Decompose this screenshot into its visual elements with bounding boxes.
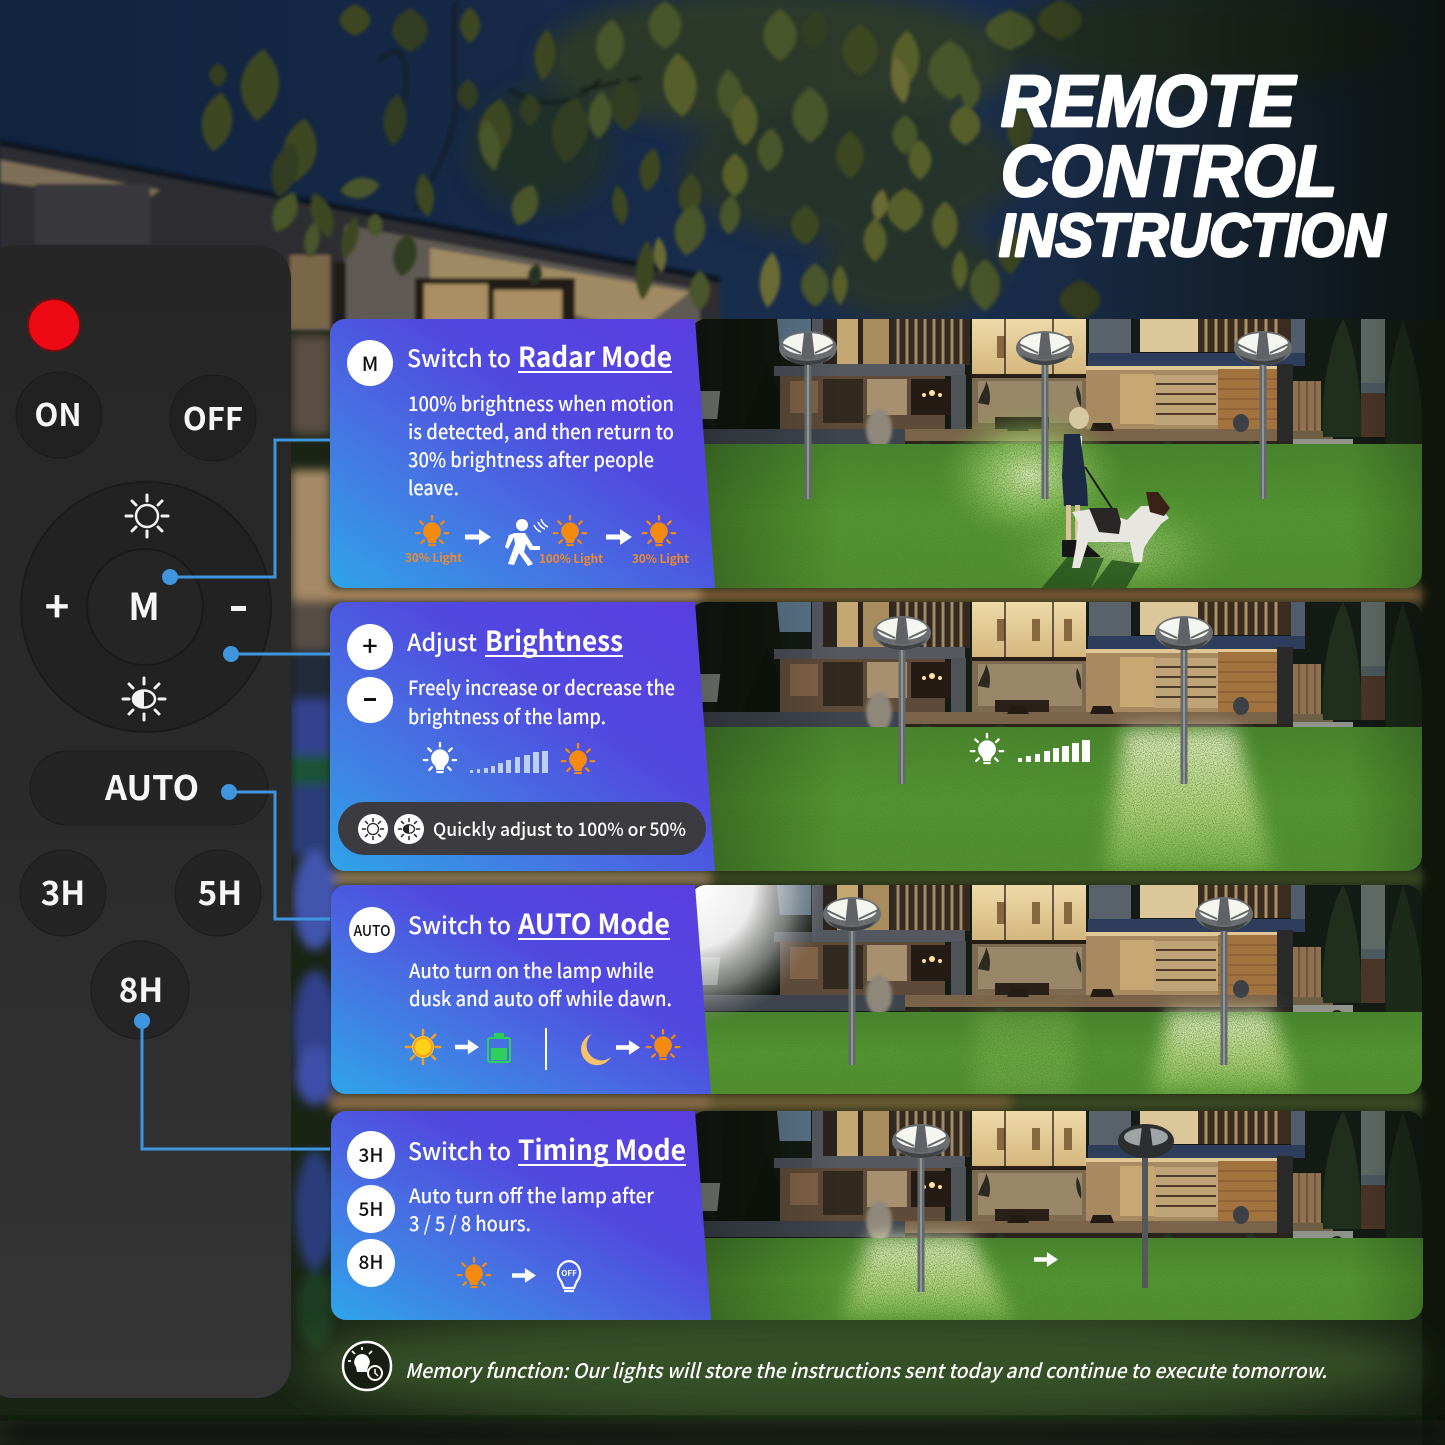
brightness up key (126, 495, 168, 537)
red indicator light (28, 299, 80, 351)
radar mode description: is detected, and then return to (408, 416, 674, 445)
radar mode description: 30% brightness after people (408, 444, 654, 473)
girl walking a dog (1062, 407, 1170, 568)
panel: adjust brightness (330, 602, 1425, 871)
quick adjust pill: Quickly adjust to 100% or 50% (433, 816, 686, 842)
8H button (91, 941, 189, 1039)
arrow overlay (1034, 1252, 1058, 1267)
AUTO badge (349, 907, 395, 953)
timing mode photo scene (695, 1111, 1425, 1320)
auto mode heading: Switch to (408, 906, 511, 941)
connector: dial to brightness (223, 646, 330, 662)
M key: M (128, 577, 160, 631)
panel: timing mode (331, 1111, 1425, 1320)
OFF button (170, 375, 256, 461)
title: REMOTE (1001, 62, 1297, 142)
5H button: 5H (198, 867, 242, 915)
radar mode sequence icons: 30% Light (632, 550, 689, 567)
connector: M to radar mode (162, 440, 330, 585)
timing mode heading (408, 1129, 686, 1169)
gaps and flowers between panels (291, 335, 1422, 1350)
8H badge (347, 1239, 395, 1287)
radar mode sequence icons: 30% Light (405, 549, 462, 566)
brightness scale icon (424, 743, 594, 774)
foliage mass (470, 0, 1400, 320)
quick adjust pill (338, 802, 706, 855)
ON button: ON (34, 390, 82, 435)
auto mode description (409, 955, 672, 1012)
timing mode description: 3 / 5 / 8 hours. (409, 1208, 531, 1237)
panel: radar mode (330, 319, 1425, 605)
timing mode heading: Timing Mode (518, 1129, 686, 1169)
plus badge: + (362, 625, 378, 664)
lamp to off icons (458, 1258, 580, 1291)
radar mode heading: Switch to (407, 339, 511, 374)
brightness heading: Brightness (485, 620, 623, 660)
M badge (347, 340, 393, 386)
radar mode photo scene (695, 319, 1425, 605)
connector: timer to timing mode (134, 1013, 330, 1149)
brightness text card (330, 602, 715, 871)
AUTO button: AUTO (104, 761, 199, 810)
remote control body (0, 245, 291, 1398)
timing mode heading: Switch to (408, 1132, 511, 1167)
radar mode description: 100% brightness when motion (408, 388, 674, 417)
minus badge (347, 677, 393, 723)
switched-off lamp (1118, 1124, 1174, 1288)
radar mode sequence icons (405, 516, 689, 567)
brightness down key (123, 678, 165, 720)
lamp to off icons: OFF (561, 1268, 577, 1279)
brightness level overlay (971, 734, 1090, 764)
brightness description (408, 672, 675, 730)
minus key (231, 606, 246, 611)
radar mode description: leave. (408, 472, 459, 501)
ON button (16, 372, 102, 458)
timing mode description (409, 1180, 655, 1237)
3H button (20, 850, 106, 936)
plus badge (347, 624, 393, 670)
auto mode heading (408, 903, 670, 943)
brightness heading: Adjust (407, 623, 477, 658)
brightness description: brightness of the lamp. (408, 701, 606, 730)
memory function note (343, 1342, 1327, 1390)
5H badge: 5H (359, 1195, 383, 1222)
M badge: M (362, 348, 378, 377)
8H button: 8H (119, 964, 163, 1012)
memory text: Memory function: Our lights will store the instructions sent today and continue to execute tomorrow. (405, 1355, 1327, 1384)
3H button: 3H (41, 867, 85, 915)
auto mode photo scene (695, 885, 1425, 1094)
connector: AUTO to auto mode (221, 784, 330, 919)
divider (545, 1028, 547, 1070)
auto mode text card (331, 885, 711, 1094)
solar charge icons (406, 1030, 510, 1064)
panel: auto mode (331, 885, 1425, 1094)
plus key: + (45, 574, 69, 635)
8H badge: 8H (359, 1248, 383, 1275)
AUTO badge: AUTO (354, 920, 390, 941)
dial pad (21, 482, 271, 732)
timing mode text card (331, 1111, 711, 1320)
title (999, 62, 1387, 269)
3H badge: 3H (359, 1141, 383, 1168)
title: INSTRUCTION (999, 202, 1387, 269)
brightness photo scene (695, 602, 1425, 871)
3H badge (347, 1131, 395, 1179)
auto mode description: Auto turn on the lamp while (409, 955, 654, 984)
brightness heading (407, 620, 623, 660)
AUTO button (30, 751, 268, 825)
darker right side (980, 0, 1445, 330)
tree leaves (198, 0, 1100, 320)
moon to lamp icons (581, 1030, 679, 1065)
radar mode text card (330, 319, 715, 588)
radar mode description (408, 388, 674, 501)
radar mode sequence icons: 100% Light (539, 550, 603, 567)
blurred house behind the remote (0, 143, 720, 330)
5H badge (347, 1185, 395, 1233)
brightness description: Freely increase or decrease the (408, 672, 675, 701)
memory icon (343, 1342, 391, 1390)
timing mode description: Auto turn off the lamp after (409, 1180, 655, 1209)
auto mode heading: AUTO Mode (517, 903, 670, 943)
OFF button: OFF (183, 394, 243, 439)
radar mode heading: Radar Mode (518, 336, 672, 376)
title: CONTROL (1001, 132, 1337, 212)
radar mode heading (407, 336, 672, 376)
auto mode description: dusk and auto off while dawn. (409, 983, 672, 1012)
5H button (175, 850, 261, 936)
